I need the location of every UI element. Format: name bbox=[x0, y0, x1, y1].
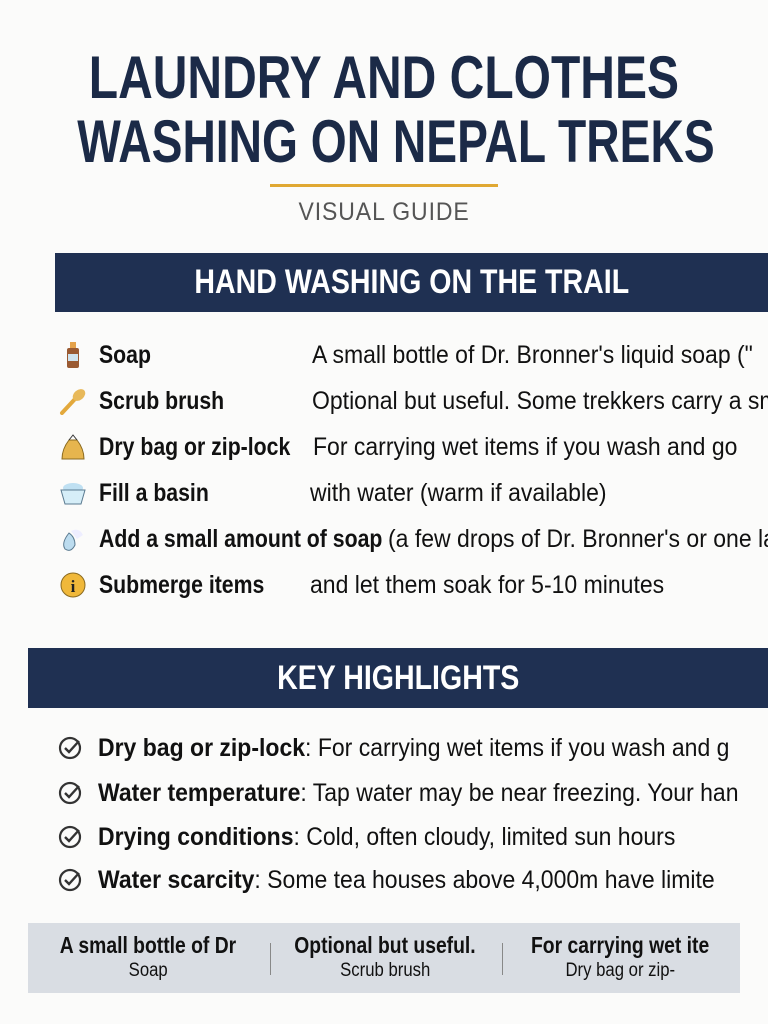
row: add soap: Add a small amount of soap bbox=[99, 525, 382, 553]
summary: bag: Dry bag or zip- bbox=[565, 960, 675, 981]
row: scrub brush: Scrub brush bbox=[99, 387, 224, 415]
row: add soap bbox=[63, 525, 768, 553]
row: fill basin: with water (warm if available) bbox=[310, 479, 607, 507]
summary: brush bbox=[294, 932, 476, 981]
row: dry bag bbox=[62, 433, 737, 461]
row: submerge bbox=[60, 571, 664, 599]
summary: soap: A small bottle of Dr bbox=[60, 932, 236, 958]
summary: bag bbox=[531, 932, 709, 981]
list: key highlights bbox=[58, 734, 739, 894]
row: dry bag: For carrying wet items if you wash and go bbox=[313, 433, 737, 461]
row: submerge: Submerge items bbox=[99, 571, 264, 599]
banner: hand washing bbox=[55, 253, 768, 312]
banner: hand washing: HAND WASHING ON THE TRAIL bbox=[194, 263, 629, 301]
gold divider bbox=[270, 184, 498, 187]
banner: key highlights: KEY HIGHLIGHTS bbox=[277, 659, 519, 697]
row: soap bbox=[67, 341, 753, 369]
title bbox=[77, 44, 715, 175]
summary: soap: Soap bbox=[128, 960, 168, 981]
row: dry bag: Dry bag or zip-lock bbox=[99, 433, 290, 461]
row: fill basin bbox=[60, 479, 607, 507]
row: fill basin: Fill a basin bbox=[99, 479, 209, 507]
subtitle: VISUAL GUIDE bbox=[298, 198, 470, 226]
summary: bag: For carrying wet ite bbox=[531, 932, 709, 958]
row: submerge: i bbox=[71, 577, 76, 596]
summary: brush: Optional but useful. bbox=[294, 932, 476, 958]
row: scrub brush bbox=[60, 387, 768, 415]
row: soap: Soap bbox=[99, 341, 151, 369]
row: soap: A small bottle of Dr. Bronner's liquid soap (" bbox=[312, 341, 753, 369]
summary bar bbox=[28, 923, 740, 993]
banner: key highlights bbox=[28, 648, 768, 708]
title: WASHING ON NEPAL TREKS bbox=[77, 108, 715, 175]
summary: soap bbox=[60, 932, 236, 981]
highlight: dry bag: Dry bag or zip-lock: For carrying wet items if you wash and g bbox=[98, 734, 729, 762]
title: LAUNDRY AND CLOTHES bbox=[89, 44, 679, 111]
highlight: water temperature: Water temperature: Tap water may be near freezing. Your han bbox=[98, 779, 739, 807]
highlight: drying: Drying conditions: Cold, often cloudy, limited sun hours bbox=[98, 823, 675, 851]
summary: brush: Scrub brush bbox=[340, 960, 430, 981]
row: submerge: and let them soak for 5-10 minutes bbox=[310, 571, 664, 599]
highlight: water scarcity: Water scarcity: Some tea houses above 4,000m have limite bbox=[98, 866, 715, 894]
list: hand washing steps bbox=[60, 341, 768, 599]
